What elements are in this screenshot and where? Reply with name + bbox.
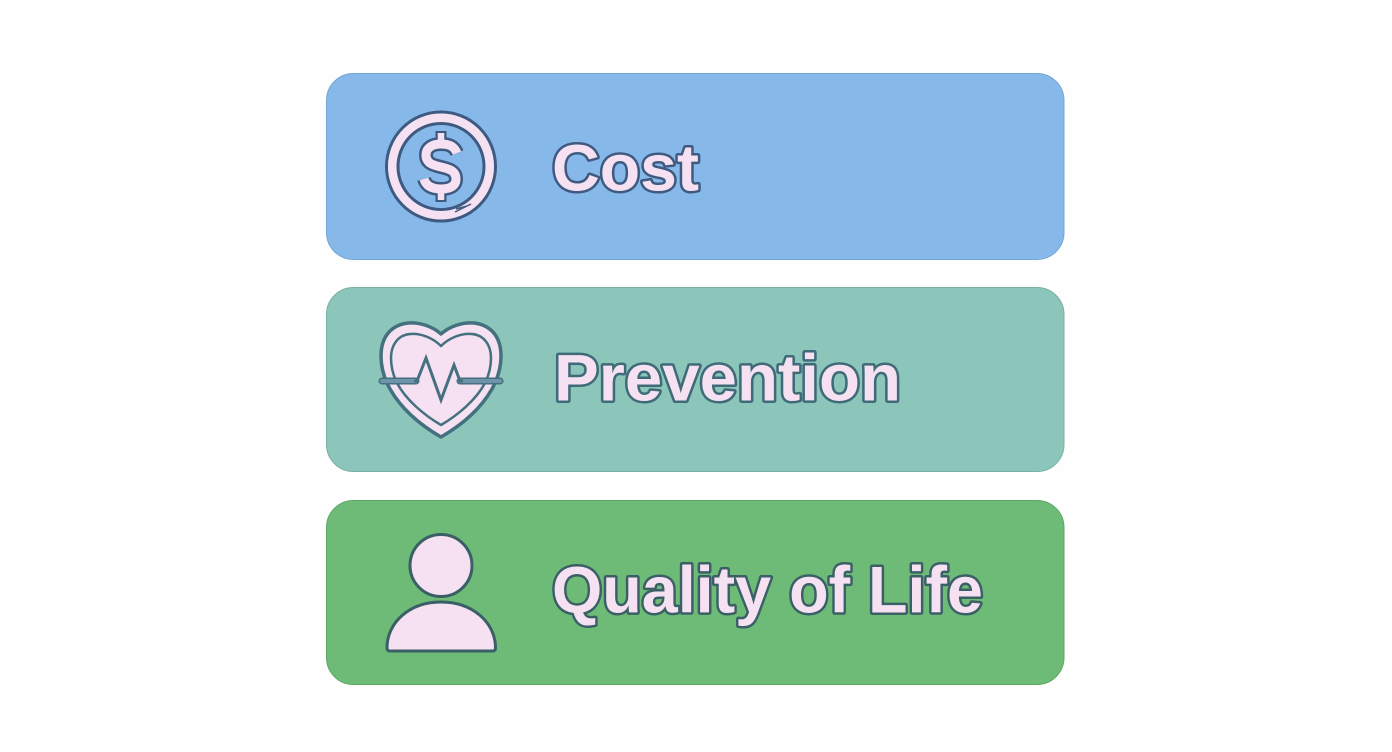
panel: prevention <box>326 288 1064 472</box>
label: Cost: Cost <box>552 130 699 204</box>
icon: dollar coin <box>386 112 496 221</box>
icon: person <box>387 534 496 651</box>
panel: cost <box>326 74 1064 260</box>
panel: quality of life <box>326 500 1064 684</box>
label: Prevention: Prevention <box>554 340 901 414</box>
icon: heart with pulse <box>381 323 501 437</box>
label: Quality of Life: Quality of Life <box>552 552 983 626</box>
